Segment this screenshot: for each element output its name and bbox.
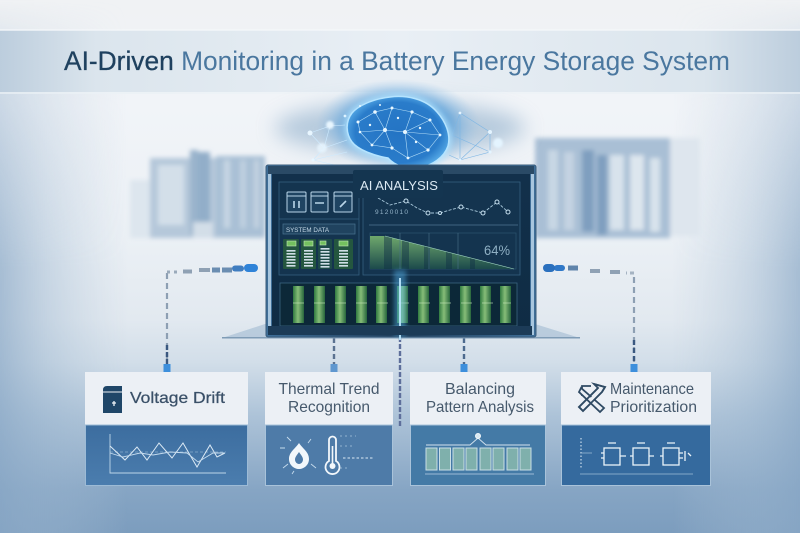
card heading: Maintenance	[610, 381, 694, 398]
card: maintenance prioritization	[561, 372, 711, 486]
icon: battery	[103, 386, 122, 413]
card cell panel	[410, 425, 546, 486]
card: thermal trend	[265, 372, 393, 486]
title band	[0, 29, 800, 94]
window icons	[287, 192, 352, 212]
card subheading: Prioritization	[610, 399, 697, 416]
card heading: Thermal Trend	[278, 381, 380, 398]
line chart	[375, 198, 510, 216]
connector: balancing	[460, 338, 468, 372]
icon: flame rays	[280, 437, 316, 474]
background battery racks right	[535, 138, 700, 238]
card icon panel	[266, 425, 392, 486]
connector: center	[399, 337, 401, 428]
side network left	[308, 115, 347, 165]
brain network	[308, 96, 503, 169]
line chart: 9120010	[375, 209, 408, 216]
AI analysis label: AI ANALYSIS	[360, 178, 438, 193]
icon: tools	[579, 384, 605, 412]
battery cell row	[280, 283, 517, 326]
icon: thermometer	[326, 437, 340, 474]
system data label: SYSTEM DATA	[286, 227, 330, 234]
brain links	[358, 108, 440, 158]
card: balancing pattern	[410, 372, 546, 486]
right panel	[363, 182, 520, 275]
area chart	[370, 233, 516, 269]
left panel	[279, 182, 359, 275]
connector: right	[547, 268, 638, 372]
card subheading: Recognition	[288, 399, 370, 416]
cabinet frame	[266, 165, 536, 337]
card schematic panel	[562, 425, 710, 486]
AI analysis label	[353, 170, 443, 198]
light beam	[394, 270, 406, 340]
card heading: Voltage Drift	[130, 390, 226, 407]
connector: thermal	[330, 338, 338, 372]
backdrop haze behind brain	[275, 79, 525, 171]
platform	[222, 324, 580, 338]
percent value: 64%	[484, 243, 510, 258]
card subheading: Pattern Analysis	[426, 399, 534, 416]
connector: left	[164, 268, 254, 372]
title: AI-Driven Monitoring in a Battery Energy Storage System	[64, 46, 730, 76]
mini battery columns	[283, 239, 353, 269]
card chart panel	[86, 425, 248, 486]
battery cabinet	[266, 165, 536, 340]
background battery racks left	[130, 150, 265, 238]
card: voltage drift	[85, 372, 248, 486]
brain outline	[347, 96, 449, 169]
brain glow	[347, 96, 449, 169]
card heading: Balancing	[445, 381, 515, 398]
icon: flame	[289, 443, 309, 469]
side network right	[449, 112, 503, 161]
icon: flame core	[295, 452, 303, 464]
brain nodes	[356, 104, 441, 159]
